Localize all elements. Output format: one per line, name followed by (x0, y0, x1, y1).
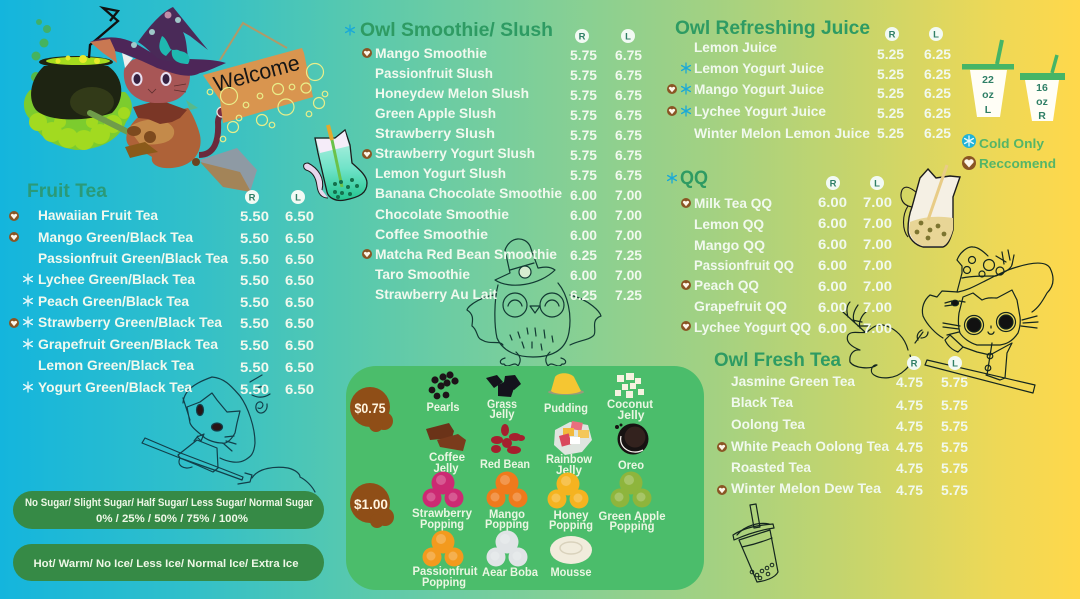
topping: Mousse (550, 536, 592, 579)
icon: 16 oz regular cup (1020, 55, 1065, 122)
row: Lemon Green/Black Tea: 6.50 (285, 359, 314, 375)
icon: 16 oz regular cup: 16 (1036, 82, 1048, 94)
sugar level pill (13, 491, 324, 529)
row: Passionfruit QQ: 7.00 (863, 257, 892, 273)
row: Lemon Yogurt Juice: Lemon Yogurt Juice (694, 60, 824, 76)
topping: Coffee Jelly (426, 423, 466, 475)
size badges: QQ (826, 176, 884, 190)
size badges: Smoothie: L (625, 32, 631, 42)
row: Winter Melon Lemon Juice: 5.25 (877, 125, 904, 141)
row: Lychee Yogurt Juice: Lychee Yogurt Juice (694, 103, 826, 119)
legend: Cold Only (962, 134, 1045, 151)
size badges: Juice: R (889, 30, 896, 40)
row: Mango Green/Black Tea: Mango Green/Black Tea (38, 229, 193, 245)
row: Lemon Yogurt Juice (682, 60, 951, 82)
row: Lemon Green/Black Tea: 5.50 (240, 359, 269, 375)
icon: 22 oz large cup: L (985, 104, 992, 116)
row: Jasmine Green Tea: 5.75 (941, 374, 968, 390)
row: Winter Melon Lemon Juice: 6.25 (924, 125, 951, 141)
row: Lychee Yogurt QQ: 7.00 (863, 320, 892, 336)
legend: Cold Only: Cold Only (979, 136, 1045, 151)
row: Milk Tea QQ: 7.00 (863, 194, 892, 210)
row: Passionfruit Green/Black Tea: 6.50 (285, 251, 314, 267)
row: Honeydew Melon Slush: 6.75 (615, 87, 642, 103)
row: Strawberry Yogurt Slush: Strawberry Yogurt Slush (375, 145, 535, 161)
row: Green Apple Slush: 5.75 (570, 107, 597, 123)
topping: Aear Boba (482, 530, 539, 579)
heading: Fruit Tea: Fruit Tea (27, 181, 107, 202)
row: Peach Green/Black Tea: 5.50 (240, 294, 269, 310)
row: Lemon Green/Black Tea (38, 357, 314, 375)
topping: Coffee Jelly: Coffee (429, 452, 465, 464)
price blob: $0.75: $0.75 (354, 401, 386, 416)
row: Mango Smoothie (362, 45, 642, 63)
topping: Red Bean (480, 424, 530, 471)
row: Banana Chocolate Smoothie: Banana Chocolate Smoothie (375, 185, 562, 201)
row: Lemon Juice: 5.25 (877, 46, 904, 62)
row: Winter Melon Lemon Juice: Winter Melon Lemon Juice (694, 125, 870, 141)
list: QQ items (681, 194, 892, 336)
size badges: Smoothie: R (579, 32, 586, 42)
illustration: cat shaped boba cup, milk tea (901, 165, 960, 247)
row: Banana Chocolate Smoothie: 7.00 (615, 187, 642, 203)
row: Yogurt Green/Black Tea (24, 379, 314, 397)
row: Jasmine Green Tea: 4.75 (896, 374, 923, 390)
row: Strawberry Au Lait (375, 286, 642, 303)
row: Strawberry Green/Black Tea: Strawberry Green/Black Tea (38, 314, 222, 330)
row: Roasted Tea (731, 459, 968, 476)
row: Lychee Green/Black Tea (24, 271, 314, 288)
row: Milk Tea QQ (681, 194, 892, 211)
row: Lemon Green/Black Tea: Lemon Green/Black Tea (38, 357, 194, 373)
row: Passionfruit Green/Black Tea: Passionfruit Green/Black Tea (38, 250, 228, 266)
list: Fruit Tea items (9, 207, 314, 397)
row: Taro Smoothie: Taro Smoothie (375, 266, 470, 282)
row: Hawaiian Fruit Tea: 5.50 (240, 208, 269, 224)
row: Lemon QQ: Lemon QQ (694, 216, 764, 232)
row: Lemon Juice: 6.25 (924, 46, 951, 62)
row: Mango Yogurt Juice (667, 81, 951, 101)
row: Chocolate Smoothie: 6.00 (570, 207, 597, 223)
row: Strawberry Slush: 6.75 (615, 127, 642, 143)
row: Lychee Green/Black Tea: Lychee Green/Black Tea (38, 271, 195, 287)
icon: 16 oz regular cup: R (1038, 110, 1046, 122)
topping: Green Apple Popping (598, 472, 666, 533)
row: Mango Yogurt Juice: 6.25 (924, 85, 951, 101)
topping: Passionfruit Popping: Passionfruit (412, 566, 478, 578)
row: Yogurt Green/Black Tea: 5.50 (240, 381, 269, 397)
list: Juice items (667, 39, 951, 141)
illustration: cat shaped boba cup, green (304, 125, 367, 200)
row: Mango Yogurt Juice: 5.25 (877, 85, 904, 101)
row: Passionfruit Green/Black Tea (38, 250, 314, 267)
topping: Grass Jelly: Grass (487, 399, 517, 411)
topping: Strawberry Popping: Strawberry (412, 508, 473, 520)
row: Honeydew Melon Slush: Honeydew Melon Slush (375, 85, 529, 101)
size badges: Smoothie (575, 29, 635, 43)
topping: Strawberry Popping: Popping (420, 519, 464, 531)
heading: Owl Refreshing Juice: Owl Refreshing Juice (675, 18, 870, 39)
illustration: green bubbling cauldron (24, 8, 132, 150)
topping: Mango Popping: Popping (485, 519, 529, 531)
sugar level pill: No Sugar/ Slight Sugar/ Half Sugar/ Less Sugar/ Normal Sugar (25, 497, 314, 509)
row: Matcha Red Bean Smoothie: Matcha Red Bean Smoothie (375, 246, 557, 262)
row: Oolong Tea (731, 416, 968, 434)
row: Mango QQ: 6.00 (818, 236, 847, 252)
row: Taro Smoothie: 7.00 (615, 267, 642, 283)
row: Mango QQ: 7.00 (863, 236, 892, 252)
row: Grapefruit Green/Black Tea: Grapefruit Green/Black Tea (38, 336, 218, 352)
heading: Owl Fresh Tea: Owl Fresh Tea (714, 350, 841, 371)
row: Mango Smoothie: Mango Smoothie (375, 45, 487, 61)
row: Strawberry Yogurt Slush (362, 145, 642, 163)
price blob: $1.00: $1.00 (354, 497, 388, 512)
row: Passionfruit Slush: 5.75 (570, 67, 597, 83)
list: Smoothie and Slush items (362, 45, 642, 303)
topping: Rainbow Jelly (546, 421, 592, 477)
topping: Green Apple Popping: Popping (610, 521, 654, 533)
row: Strawberry Slush (375, 125, 642, 143)
icon: 22 oz large cup (962, 40, 1014, 117)
icon: 22 oz large cup: oz (982, 89, 994, 101)
topping: Oreo (615, 424, 648, 472)
row: Mango Smoothie: 5.75 (570, 47, 597, 63)
row: Milk Tea QQ: Milk Tea QQ (694, 195, 772, 211)
row: Strawberry Au Lait: 6.25 (570, 287, 597, 303)
row: Taro Smoothie (375, 266, 642, 283)
row: Grapefruit QQ: Grapefruit QQ (694, 298, 787, 314)
row: White Peach Oolong Tea: White Peach Oolong Tea (731, 438, 889, 454)
icon: 22 oz large cup: 22 (982, 74, 994, 86)
row: Strawberry Green/Black Tea (9, 314, 314, 331)
row: Roasted Tea: 5.75 (941, 460, 968, 476)
price blob: $1.00 (350, 483, 394, 528)
row: Hawaiian Fruit Tea: 6.50 (285, 208, 314, 224)
topping: Coconut Jelly: Jelly (618, 410, 645, 422)
row: Lychee Yogurt QQ: 6.00 (818, 320, 847, 336)
ice level pill: Hot/ Warm/ No Ice/ Less Ice/ Normal Ice/ Extra Ice (34, 558, 298, 570)
topping: Coffee Jelly: Jelly (434, 463, 459, 475)
row: Hawaiian Fruit Tea: Hawaiian Fruit Tea (38, 207, 158, 223)
row: Passionfruit QQ: Passionfruit QQ (694, 257, 794, 273)
row: Winter Melon Dew Tea: Winter Melon Dew Tea (731, 480, 881, 496)
row: Grapefruit Green/Black Tea (24, 336, 314, 353)
topping: Passionfruit Popping (412, 530, 478, 589)
row: Strawberry Green/Black Tea: 5.50 (240, 315, 269, 331)
size badges: Fruit Tea (245, 190, 305, 204)
row: Grapefruit QQ: 6.00 (818, 299, 847, 315)
row: Black Tea: 4.75 (896, 397, 923, 413)
sugar level pill: 0% / 25% / 50% / 75% / 100% (96, 513, 248, 525)
row: Lychee Yogurt QQ (681, 319, 892, 336)
row: Strawberry Au Lait: Strawberry Au Lait (375, 286, 497, 302)
row: Lychee Yogurt Juice: 6.25 (924, 105, 951, 121)
size badges: Juice: L (933, 30, 939, 40)
row: Chocolate Smoothie (375, 206, 642, 223)
row: Taro Smoothie: 6.00 (570, 267, 597, 283)
row: Matcha Red Bean Smoothie: 6.25 (570, 247, 597, 263)
size badges: Fresh Tea: L (952, 358, 958, 370)
topping: Oreo: Oreo (618, 460, 644, 472)
size badges: QQ: R (830, 178, 837, 190)
size badges: Fresh Tea: R (911, 358, 918, 370)
row: Mango Yogurt Juice: Mango Yogurt Juice (694, 81, 824, 97)
row: Winter Melon Dew Tea: 4.75 (896, 482, 923, 498)
topping: Green Apple Popping: Green Apple (598, 511, 666, 523)
row: Mango QQ: Mango QQ (694, 237, 765, 253)
row: Winter Melon Dew Tea: 5.75 (941, 482, 968, 498)
row: Lychee Yogurt Juice (667, 103, 951, 121)
row: Matcha Red Bean Smoothie (362, 246, 642, 263)
row: Coffee Smoothie: Coffee Smoothie (375, 226, 488, 242)
row: Peach Green/Black Tea: 6.50 (285, 294, 314, 310)
row: Black Tea: Black Tea (731, 394, 793, 410)
row: Lemon Yogurt Slush: 6.75 (615, 167, 642, 183)
illustration: outlined boba cup (733, 504, 778, 582)
row: Grapefruit QQ (694, 298, 892, 315)
row: Peach QQ: Peach QQ (694, 277, 759, 293)
row: Black Tea (731, 394, 968, 413)
row: Passionfruit Slush: Passionfruit Slush (375, 65, 493, 81)
heading: Owl Smoothie/ Slush: Owl Smoothie/ Slush (360, 20, 553, 41)
row: Peach QQ (681, 277, 892, 294)
illustration: welcome sign with bubbles (203, 23, 328, 142)
topping: Honey Popping: Popping (549, 520, 593, 532)
row: Matcha Red Bean Smoothie: 7.25 (615, 247, 642, 263)
topping: Rainbow Jelly: Rainbow (546, 454, 592, 466)
row: Lemon Yogurt Juice: 6.25 (924, 66, 951, 82)
topping: Mousse: Mousse (550, 567, 592, 579)
size badges: Juice (885, 27, 943, 41)
row: Yogurt Green/Black Tea: Yogurt Green/Black Tea (38, 379, 192, 395)
icon: 16 oz regular cup: oz (1036, 96, 1048, 108)
row: Grapefruit QQ: 7.00 (863, 299, 892, 315)
topping: Aear Boba: Aear Boba (482, 567, 539, 579)
topping: Pearls: Pearls (426, 402, 460, 414)
row: Jasmine Green Tea: Jasmine Green Tea (731, 373, 855, 389)
illustration: outlined witch cat, right (843, 247, 1053, 393)
row: Coffee Smoothie: 6.00 (570, 227, 597, 243)
row: Chocolate Smoothie: 7.00 (615, 207, 642, 223)
row: Mango Green/Black Tea (9, 229, 314, 246)
topping: Passionfruit Popping: Popping (422, 577, 466, 589)
row: Honeydew Melon Slush: 5.75 (570, 87, 597, 103)
row: Green Apple Slush (375, 105, 642, 123)
illustration: welcome sign with bubbles: Welcome (211, 50, 302, 97)
row: Banana Chocolate Smoothie: 6.00 (570, 187, 597, 203)
row: Roasted Tea: 4.75 (896, 460, 923, 476)
row: Oolong Tea: Oolong Tea (731, 416, 805, 432)
row: Lemon QQ: 7.00 (863, 215, 892, 231)
row: Grapefruit Green/Black Tea: 5.50 (240, 337, 269, 353)
row: Peach QQ: 7.00 (863, 278, 892, 294)
row: Passionfruit Slush: 6.75 (615, 67, 642, 83)
topping: Pudding: Pudding (544, 403, 588, 415)
topping: Strawberry Popping (412, 472, 473, 531)
row: Oolong Tea: 4.75 (896, 418, 923, 434)
row: Grapefruit Green/Black Tea: 6.50 (285, 337, 314, 353)
row: Oolong Tea: 5.75 (941, 418, 968, 434)
row: Passionfruit Slush (375, 65, 642, 83)
row: Lychee Green/Black Tea: 5.50 (240, 272, 269, 288)
illustration: outlined witch cat, left (142, 375, 315, 492)
row: White Peach Oolong Tea (717, 438, 968, 455)
row: Strawberry Green/Black Tea: 6.50 (285, 315, 314, 331)
row: Mango QQ (694, 236, 892, 253)
size badges: Fresh Tea (907, 356, 962, 370)
row: Strawberry Yogurt Slush: 6.75 (615, 147, 642, 163)
row: Green Apple Slush: 6.75 (615, 107, 642, 123)
row: Lemon Yogurt Slush: 5.75 (570, 167, 597, 183)
row: Strawberry Au Lait: 7.25 (615, 287, 642, 303)
row: Jasmine Green Tea (731, 373, 968, 390)
row: Peach Green/Black Tea: Peach Green/Black Tea (38, 293, 189, 309)
row: Green Apple Slush: Green Apple Slush (375, 105, 496, 121)
row: Banana Chocolate Smoothie (375, 185, 642, 203)
size badges: Fruit Tea: L (295, 192, 301, 204)
topping: Pearls (426, 371, 460, 414)
row: Mango Smoothie: 6.75 (615, 47, 642, 63)
topping: Honey Popping: Honey (554, 510, 589, 522)
row: Lemon QQ: 6.00 (818, 215, 847, 231)
row: Lychee Yogurt QQ: Lychee Yogurt QQ (694, 319, 811, 335)
row: Lemon Yogurt Slush: Lemon Yogurt Slush (375, 165, 506, 181)
row: Lemon Yogurt Slush (375, 165, 642, 183)
row: White Peach Oolong Tea: 5.75 (941, 439, 968, 455)
row: Lychee Green/Black Tea: 6.50 (285, 272, 314, 288)
row: Passionfruit QQ (694, 257, 892, 273)
topping: Honey Popping (548, 472, 593, 532)
panel: toppings (346, 366, 704, 590)
row: Mango Green/Black Tea: 5.50 (240, 230, 269, 246)
row: Peach QQ: 6.00 (818, 278, 847, 294)
row: Winter Melon Dew Tea (717, 480, 968, 498)
topping: Pudding (544, 373, 588, 415)
row: Lemon Juice (694, 39, 951, 62)
illustration: outlined owl with witch hat (467, 239, 601, 366)
topping: Rainbow Jelly: Jelly (556, 465, 583, 477)
row: Winter Melon Lemon Juice (694, 125, 951, 141)
row: Hawaiian Fruit Tea (9, 207, 314, 224)
row: Strawberry Slush: 5.75 (570, 127, 597, 143)
price blob: $0.75 (350, 387, 393, 432)
topping: Grass Jelly: Jelly (490, 409, 515, 421)
size badges: Fruit Tea: R (249, 192, 256, 204)
row: White Peach Oolong Tea: 4.75 (896, 439, 923, 455)
row: Mango Green/Black Tea: 6.50 (285, 230, 314, 246)
topping: Mango Popping: Mango (489, 509, 525, 521)
list: Fresh Tea items (717, 373, 968, 498)
row: Strawberry Slush: Strawberry Slush (375, 125, 495, 141)
row: Coffee Smoothie (375, 226, 642, 243)
heading: QQ: QQ (680, 168, 708, 189)
topping: Grass Jelly (486, 375, 521, 421)
row: Passionfruit Green/Black Tea: 5.50 (240, 251, 269, 267)
row: Honeydew Melon Slush (375, 85, 642, 103)
row: Chocolate Smoothie: Chocolate Smoothie (375, 206, 509, 222)
row: Roasted Tea: Roasted Tea (731, 459, 811, 475)
row: Strawberry Yogurt Slush: 5.75 (570, 147, 597, 163)
row: Lemon QQ (694, 215, 892, 232)
ice level pill (13, 544, 324, 581)
row: Milk Tea QQ: 6.00 (818, 194, 847, 210)
row: Lychee Yogurt Juice: 5.25 (877, 105, 904, 121)
topping: Red Bean: Red Bean (480, 459, 530, 471)
row: Yogurt Green/Black Tea: 6.50 (285, 381, 314, 397)
heading: QQ (668, 168, 708, 189)
row: Lemon Juice: Lemon Juice (694, 39, 777, 55)
size badges: QQ: L (874, 178, 880, 190)
row: Black Tea: 5.75 (941, 397, 968, 413)
row: Lemon Yogurt Juice: 5.25 (877, 66, 904, 82)
topping: Mango Popping (485, 472, 529, 531)
topping: Coconut Jelly (607, 373, 653, 422)
topping: Coconut Jelly: Coconut (607, 399, 653, 411)
legend: Reccomend: Reccomend (979, 156, 1056, 171)
row: Passionfruit QQ: 6.00 (818, 257, 847, 273)
row: Peach Green/Black Tea (24, 293, 314, 310)
row: Coffee Smoothie: 7.00 (615, 227, 642, 243)
illustration: witch cat on broom (90, 7, 257, 192)
